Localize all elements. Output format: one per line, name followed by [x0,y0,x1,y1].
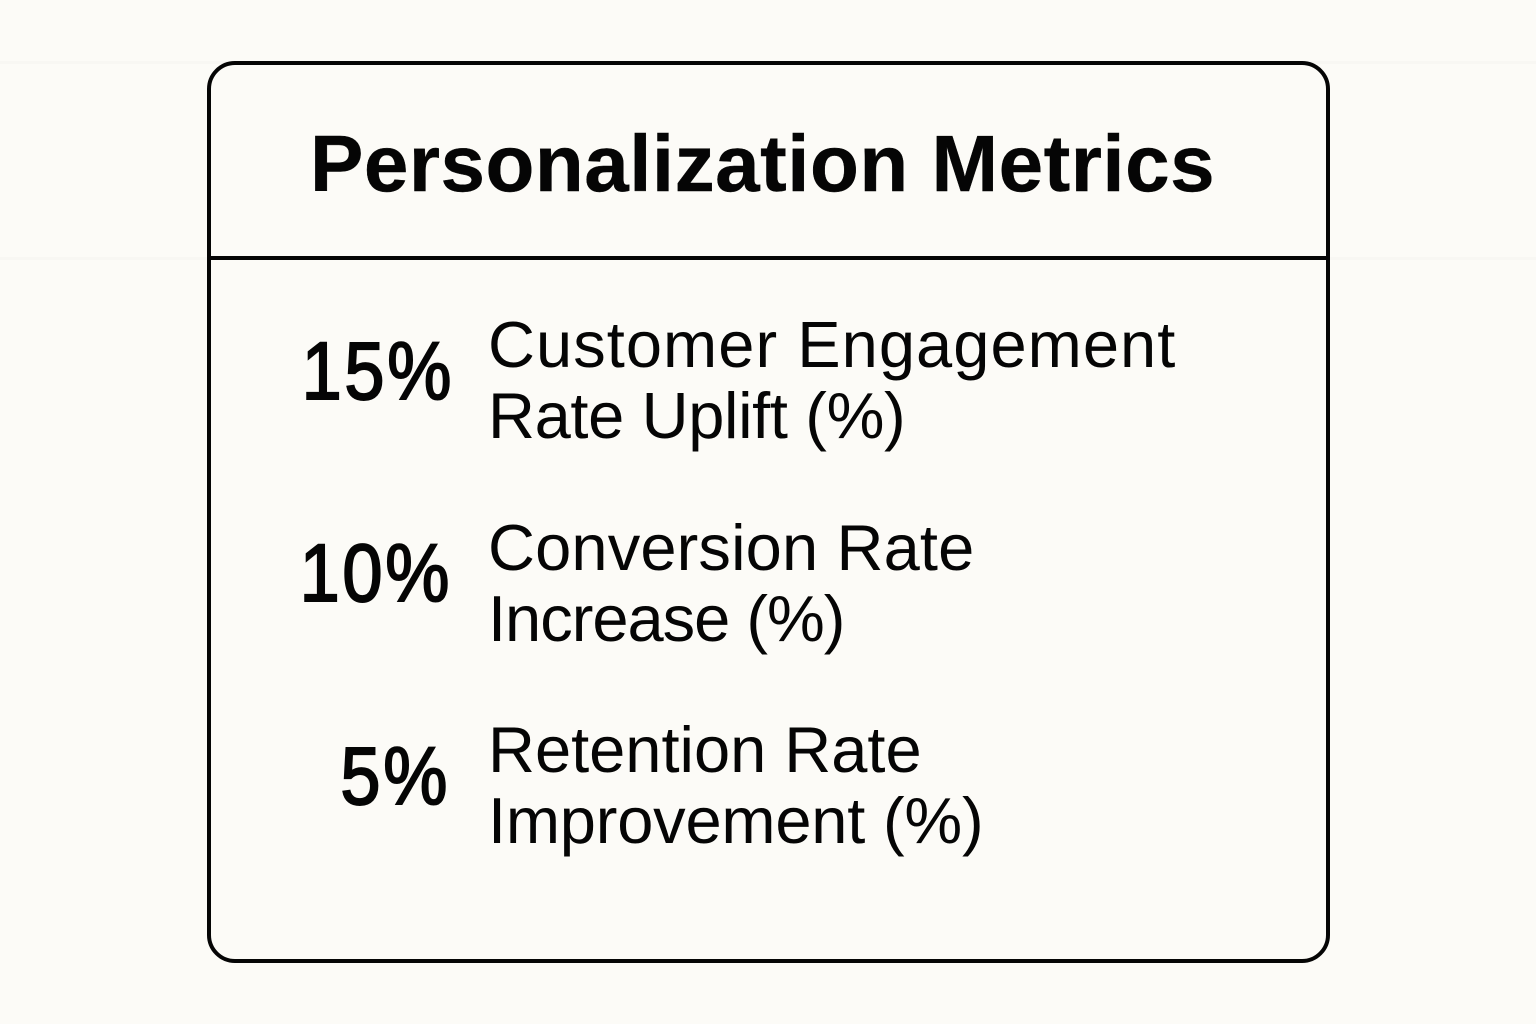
title: Personalization Metrics [310,119,1215,208]
metric label: retention rate: Retention Rate [488,713,922,786]
metric label: retention rate: Improvement (%) [488,784,983,857]
metric label: customer engagement [488,308,1176,452]
metric label: conversion rate: Conversion Rate [488,511,974,584]
metric value: 10%: 10% [300,528,452,619]
metric label: conversion rate [488,511,974,655]
metric label: retention rate [488,713,983,857]
card panel [207,61,1330,963]
metric label: customer engagement: Rate Uplift (%) [488,379,905,452]
metric label: conversion rate: Increase (%) [488,582,844,655]
metric label: customer engagement: Customer Engagement [488,308,1176,381]
metric value: 5%: 5% [340,731,450,822]
metric value: 15%: 15% [302,326,454,417]
